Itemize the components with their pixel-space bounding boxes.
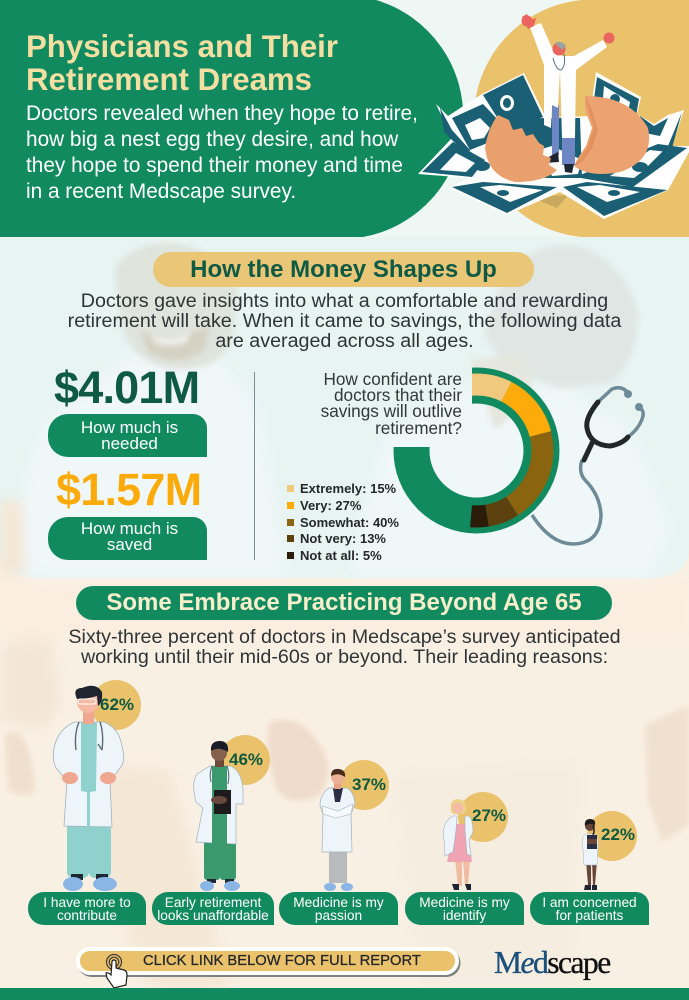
heading: Some Embrace Practicing Beyond Age 65: Some Embrace Practicing Beyond Age 65 (106, 589, 582, 616)
reason pill: passion: Medicine is my (293, 894, 384, 910)
paragraph: savings intro: are averaged across all ages. (215, 330, 474, 352)
donut question: How confident are (323, 369, 462, 389)
segment: not at all (470, 504, 489, 528)
figure 1 (53, 686, 124, 891)
stat: amount needed (48, 362, 207, 457)
paragraph: savings intro: Doctors gave insights into what a comfortable and rewarding (81, 290, 608, 312)
title (26, 29, 338, 97)
heading: How the Money Shapes Up (153, 252, 534, 287)
intro text: they hope to spend their money and time (26, 154, 403, 177)
value: $4.01M (54, 362, 199, 413)
coat (530, 23, 607, 138)
illustration: doctor hatching from egg on money (418, 14, 689, 219)
segment: extremely (472, 374, 512, 402)
Medscape logo: Medscape (494, 945, 610, 980)
centre note behind doctor (510, 118, 582, 178)
percent: 62: 62% (100, 695, 134, 714)
pill label (48, 414, 207, 457)
legend: not very: Not very: 13% (300, 531, 386, 546)
percent: 46: 46% (229, 750, 263, 769)
segment: very (502, 382, 551, 437)
white backing (418, 72, 689, 219)
pill label: saved (107, 535, 152, 554)
pill label: How much is (81, 519, 178, 538)
heading: How the Money Shapes Up: How the Money Shapes Up (190, 256, 497, 283)
reason pill: identify: identify (443, 908, 486, 923)
reason pill: passion (279, 892, 398, 925)
back notes (483, 75, 543, 133)
intro text: Doctors revealed when they hope to retire, (26, 102, 418, 125)
legend: somewhat: Somewhat: 40% (300, 515, 399, 530)
header shapes (0, 0, 689, 237)
paragraph: reasons intro: working until their mid-60s or beyond. Their leading reasons: (81, 646, 608, 668)
icon: pointer hand (105, 954, 128, 988)
donut question: retirement? (375, 418, 462, 438)
pill label: needed (101, 434, 158, 453)
donut chart: confidence (394, 368, 560, 534)
reason pill: contribute (28, 892, 146, 925)
reason pill: unaffordable (152, 892, 274, 925)
left wing note (422, 142, 485, 177)
reason pill: contribute: I have more to (43, 894, 131, 910)
reason pill: patients: for patients (556, 908, 623, 923)
header panel (0, 0, 689, 237)
title: Retirement Dreams (26, 62, 312, 97)
segment: not very (485, 497, 518, 526)
legend: very: Very: 27% (300, 498, 361, 513)
donut question: doctors that their (334, 385, 462, 405)
figure 5 (582, 819, 598, 890)
reason pill: patients (530, 892, 649, 925)
pill label: How much is (81, 418, 178, 437)
reason pill: passion: passion (315, 908, 362, 923)
percent circles (94, 680, 637, 861)
intro text: in a recent Medscape survey. (26, 180, 296, 203)
legend (287, 481, 399, 563)
legend: extremely: Extremely: 15% (300, 481, 396, 496)
reason pill: identify (405, 892, 524, 925)
legs (552, 105, 559, 155)
reason pill: unaffordable: looks unaffordable (157, 908, 269, 923)
segment: somewhat (506, 431, 554, 516)
percent: 27: 27% (472, 806, 506, 825)
intro text (26, 102, 418, 203)
reason pill: contribute: contribute (57, 908, 117, 923)
percent: 37: 37% (352, 775, 386, 794)
call to action button: CLICK LINK BELOW FOR FULL REPORT (143, 953, 421, 969)
figure 3 (320, 769, 355, 891)
donut question: savings will outlive (321, 401, 462, 421)
stat: amount saved (48, 464, 207, 560)
right wing note (575, 144, 687, 187)
call to action button (76, 947, 459, 975)
reason pill: unaffordable: Early retirement (165, 894, 261, 910)
percentages (100, 695, 635, 844)
legend: not at all: Not at all: 5% (300, 548, 382, 563)
value: $1.57M (56, 464, 201, 515)
intro text: how big a nest egg they desire, and how (26, 128, 398, 151)
title: Physicians and Their (26, 29, 338, 64)
divider (254, 372, 255, 560)
figure 4 (443, 799, 473, 890)
reason pill: identify: Medicine is my (419, 894, 510, 910)
mint overlay area (0, 230, 689, 578)
paragraph: reasons intro: Sixty-three percent of doctors in Medscape’s survey anticipated (68, 626, 621, 648)
figure 2 (194, 741, 243, 891)
donut question (321, 369, 462, 438)
shadow (530, 195, 568, 208)
paragraph: savings intro: retirement will take. When it came to savings, the following data (68, 310, 621, 332)
paragraph: savings intro (68, 290, 622, 352)
doctor figures (52, 686, 598, 891)
paragraph: reasons intro (68, 626, 621, 668)
bottom notes (452, 182, 557, 213)
percent: 22: 22% (601, 825, 635, 844)
pill label (48, 517, 207, 560)
stethoscope icon (530, 386, 645, 546)
footer bar (0, 988, 689, 1000)
reason pill: patients: I am concerned (542, 894, 637, 910)
